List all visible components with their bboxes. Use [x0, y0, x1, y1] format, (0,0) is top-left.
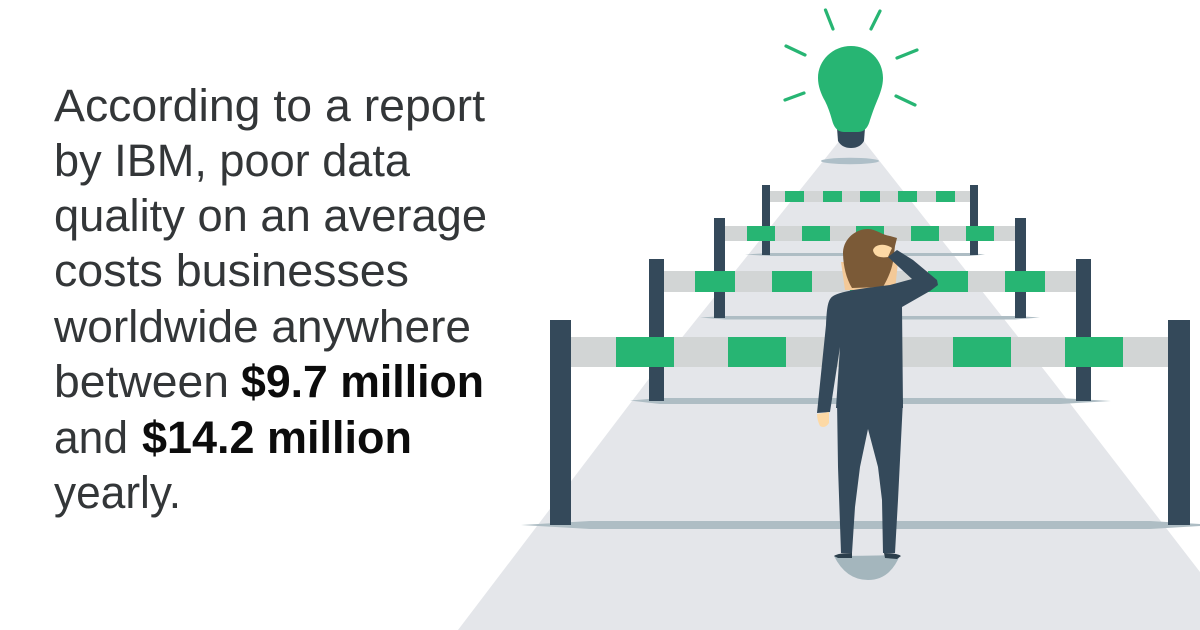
barrier 2 — [700, 218, 1040, 320]
barrier 4 (nearest) — [521, 320, 1200, 529]
text block: IBM statistic: yearly. — [54, 467, 181, 518]
text block: IBM statistic: costs businesses — [54, 245, 409, 296]
text block: IBM statistic: $9.7 million — [241, 356, 484, 407]
man floor shadow — [834, 555, 900, 580]
man torso and arms — [817, 250, 938, 413]
text block: IBM statistic — [53, 80, 487, 518]
road in perspective — [458, 140, 1200, 630]
barrier 1 (farthest) — [745, 185, 985, 256]
text block: IBM statistic: quality on an average — [54, 190, 487, 241]
text block: IBM statistic: and — [54, 412, 128, 463]
bulb rays — [785, 10, 917, 105]
man hair — [843, 229, 897, 288]
barrier 3 — [630, 259, 1111, 404]
text block: IBM statistic: by IBM, poor data — [54, 135, 411, 186]
bulb shadow — [821, 158, 879, 164]
man legs — [837, 400, 903, 553]
text block: IBM statistic: worldwide anywhere — [53, 301, 471, 352]
text block: IBM statistic: $14.2 million — [142, 412, 412, 463]
man scratching hand — [873, 245, 892, 257]
man feet — [834, 553, 901, 559]
bulb glass — [818, 46, 883, 132]
text block: IBM statistic: According to a report — [54, 80, 486, 131]
man from behind, scratching head — [817, 229, 938, 580]
man left hand — [817, 412, 829, 427]
man ear and neck — [841, 262, 898, 290]
bulb base — [837, 128, 865, 148]
light bulb — [785, 10, 917, 164]
text block: IBM statistic: between — [54, 356, 229, 407]
